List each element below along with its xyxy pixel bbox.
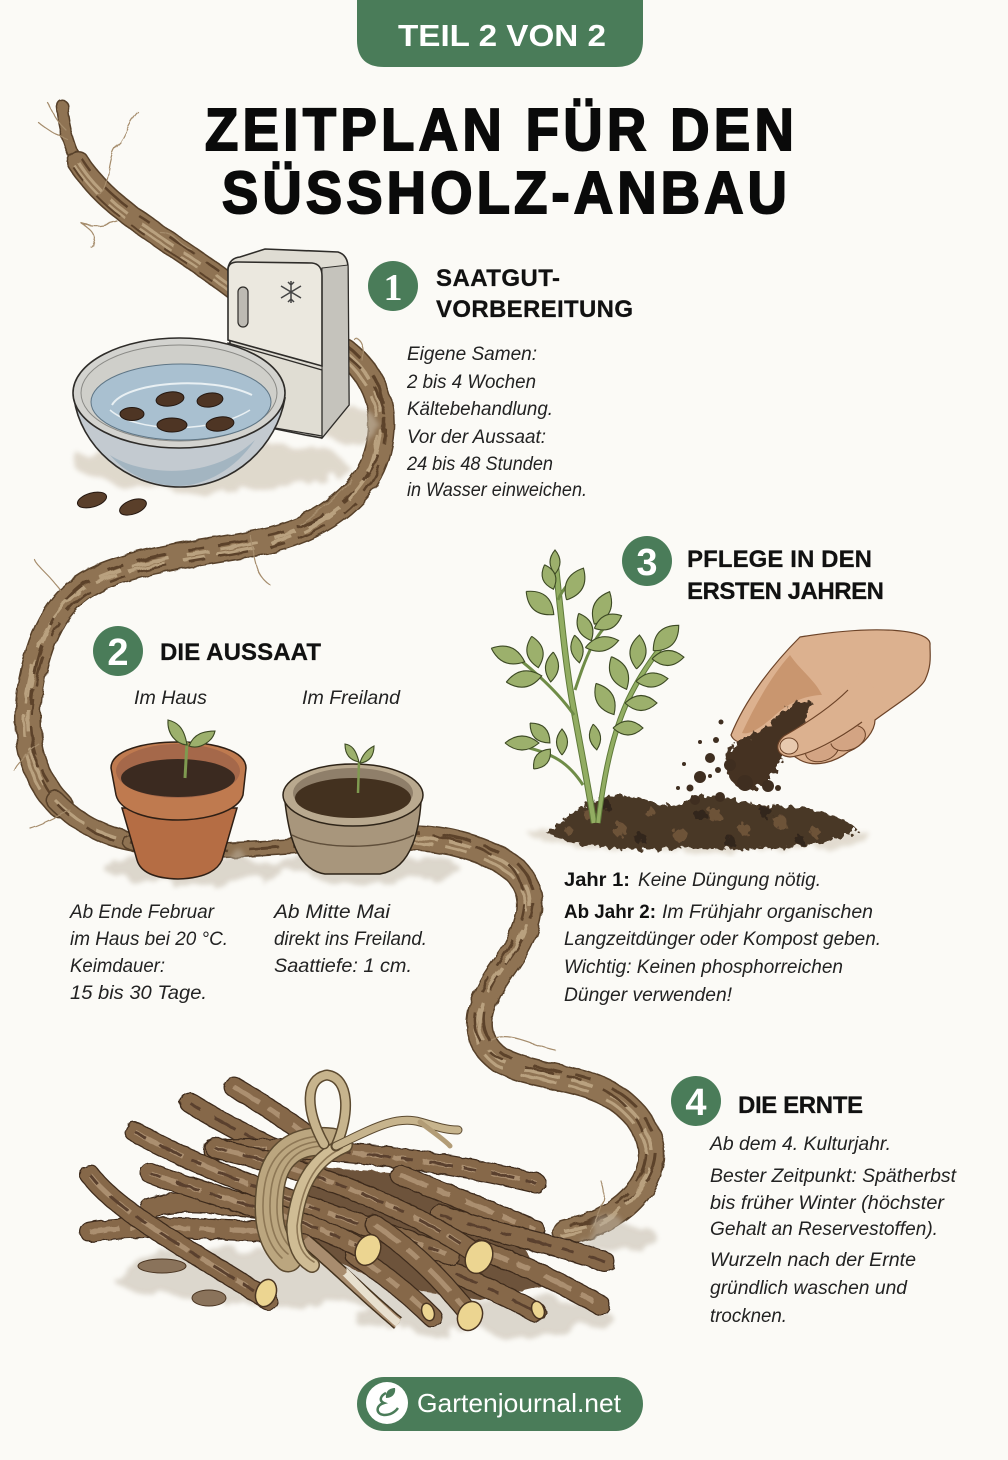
step 3 text: Wichtig: Keinen phosphorreichen — [564, 957, 843, 978]
step 2 text: indoors: im Haus bei 20 °C. — [70, 929, 228, 950]
step 1 text — [406, 344, 587, 501]
title — [205, 98, 794, 227]
title: SÜSSHOLZ-ANBAU — [222, 161, 787, 227]
step 2 text: outdoors: Ab Mitte Mai — [273, 902, 391, 923]
icon: logo seedling — [366, 1382, 408, 1424]
step 2 labels — [134, 688, 401, 709]
step 1 text: Vor der Aussaat: — [407, 427, 546, 448]
ground wash — [530, 821, 870, 849]
lower fingers — [802, 734, 842, 766]
step 3 text: Langzeitdünger oder Kompost geben. — [564, 929, 881, 950]
step 2 heading: DIE AUSSAAT — [160, 639, 321, 666]
step 2 text: indoors: Keimdauer: — [70, 956, 165, 977]
step 4 text: Gehalt an Reservestoffen). — [710, 1219, 938, 1240]
footer pill — [357, 1377, 643, 1431]
step 3 text — [564, 870, 881, 1006]
step 4 heading: 4 — [685, 1082, 707, 1124]
step 1 text: Eigene Samen: — [407, 344, 537, 365]
step 2 text: indoors — [69, 902, 228, 1004]
step 2 text: outdoors: Saattiefe: 1 cm. — [274, 956, 412, 977]
icon: terracotta pot — [111, 720, 246, 879]
icon: bowl with water and seeds — [73, 338, 285, 518]
step 1 text: 24 bis 48 Stunden — [406, 454, 553, 475]
twine — [263, 1075, 458, 1265]
seedling — [345, 744, 374, 793]
step 3 heading: 3 — [636, 542, 658, 584]
step 1 heading: SAATGUT- — [436, 265, 560, 292]
step 3 heading: PFLEGE IN DEN — [687, 546, 872, 573]
step 1 text: in Wasser einweichen. — [407, 480, 587, 501]
header pill: TEIL 2 VON 2 — [398, 18, 606, 53]
icon: snowflake — [281, 281, 301, 303]
step 4 text: trocknen. — [710, 1306, 787, 1327]
header pill — [357, 0, 643, 67]
thumb — [778, 672, 885, 757]
ground wash under bowl — [75, 409, 380, 491]
icon: fridge — [228, 249, 349, 438]
icon: fibre pot — [283, 744, 423, 874]
stones — [138, 1259, 226, 1306]
step 3 illustration: plant and hand with soil — [488, 550, 930, 849]
icon: hand dropping soil — [676, 630, 930, 805]
step 1 heading — [368, 261, 633, 323]
footer pill: Gartenjournal.net — [417, 1388, 622, 1418]
step 4 illustration: bundle of licorice roots — [90, 1075, 655, 1335]
step 4 heading: DIE ERNTE — [738, 1092, 863, 1119]
step 4 text: Wurzeln nach der Ernte — [710, 1250, 916, 1271]
sticks — [90, 1087, 605, 1323]
licorice root path — [14, 102, 655, 1237]
soil in palm — [726, 701, 812, 790]
step 3 text: Keine Düngung nötig. — [638, 870, 821, 891]
step 3 text: Dünger verwenden! — [564, 985, 733, 1006]
step 3 heading: ERSTEN JAHREN — [687, 578, 884, 605]
step 4 text: gründlich waschen und — [710, 1278, 908, 1299]
step 4 text: bis früher Winter (höchster — [710, 1193, 945, 1214]
step 2 text: indoors: Ab Ende Februar — [69, 902, 215, 923]
step 3 text: Im Frühjahr organischen — [662, 902, 873, 923]
loose seeds — [76, 489, 149, 518]
step 1 text: Kältebehandlung. — [407, 399, 553, 420]
soil mound — [545, 795, 858, 849]
step 4 text: Ab dem 4. Kulturjahr. — [709, 1134, 891, 1155]
step 1 heading: 1 — [384, 267, 402, 309]
step 3 text: Ab Jahr 2: — [564, 902, 656, 923]
step 2 text: indoors: 15 bis 30 Tage. — [70, 983, 207, 1004]
step 2 text: outdoors — [273, 902, 427, 977]
step 4 heading — [671, 1076, 863, 1126]
seedling — [168, 720, 215, 778]
ground wash under pots — [105, 854, 460, 884]
step 4 text — [709, 1134, 957, 1327]
step 1 text: 2 bis 4 Wochen — [406, 372, 536, 393]
step 1 heading: VORBEREITUNG — [436, 296, 633, 323]
step 2 heading — [93, 626, 321, 676]
icon: young plant — [488, 550, 685, 823]
step 4 text: Bester Zeitpunkt: Spätherbst — [710, 1166, 957, 1187]
cut ends — [252, 1230, 547, 1335]
step 2 labels: Im Haus — [134, 688, 208, 709]
step 3 heading — [622, 536, 884, 605]
step 1 illustration: fridge and bowl — [73, 249, 380, 518]
title: ZEITPLAN FÜR DEN — [205, 98, 794, 164]
ground wash — [110, 1221, 655, 1335]
seeds in water — [120, 390, 235, 433]
step 2 heading: 2 — [107, 632, 129, 674]
falling soil particles — [676, 720, 781, 805]
step 3 text: Jahr 1: — [564, 870, 630, 891]
step 2 illustration: two pots — [105, 720, 460, 884]
step 2 text: outdoors: direkt ins Freiland. — [274, 929, 427, 950]
step 2 labels: Im Freiland — [302, 688, 401, 709]
